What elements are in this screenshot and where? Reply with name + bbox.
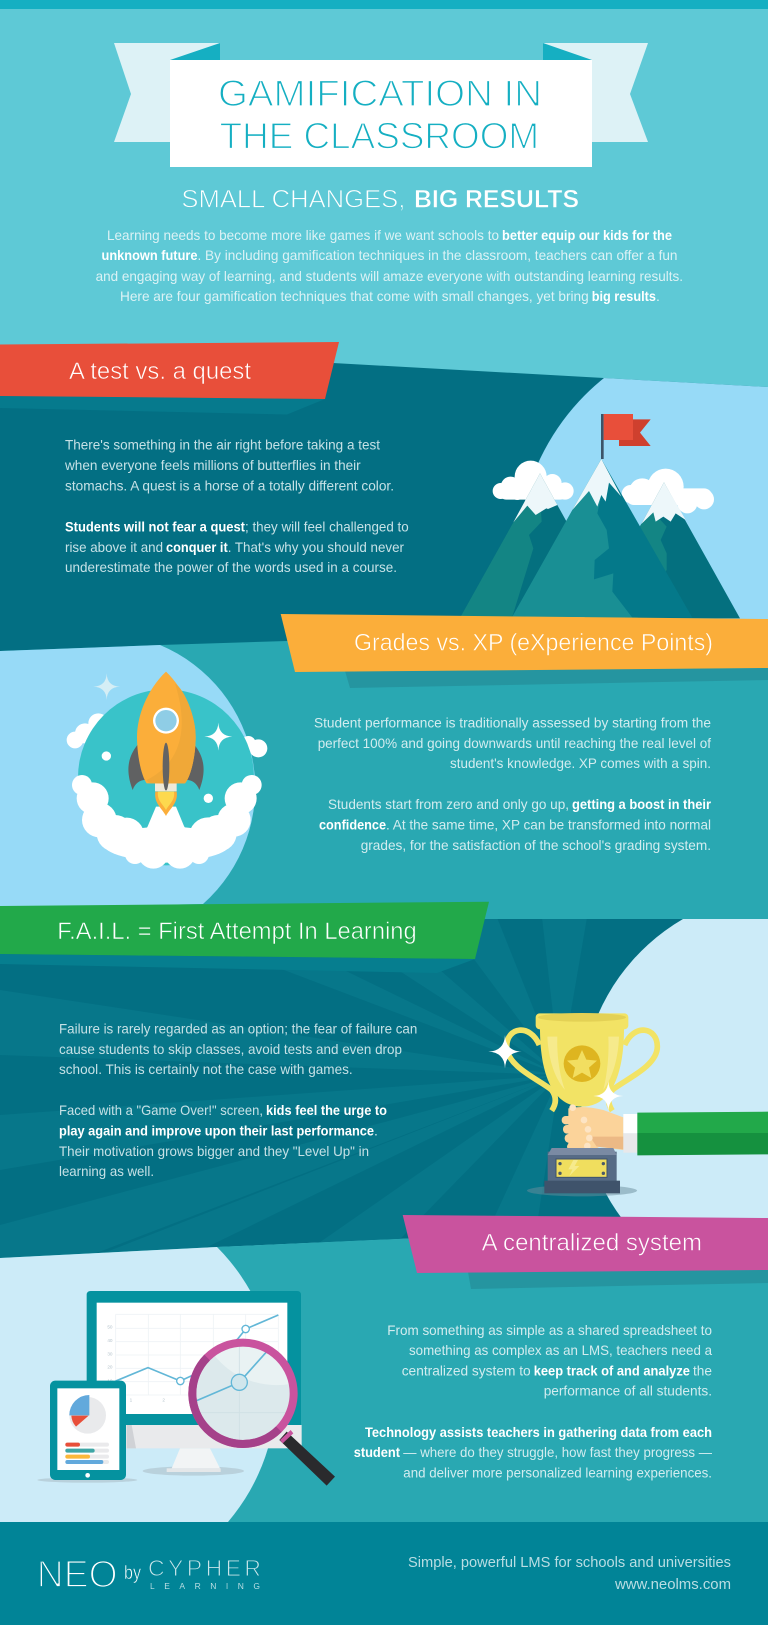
icon: monitor, tablet and magnifier <box>37 1291 335 1486</box>
rocket fins <box>128 745 145 790</box>
text block: section 4: From something as simple as a shared spreadsheet to <box>387 1322 712 1338</box>
intro paragraph: and engaging way of learning, and students will amaze everyone with outstanding learning results. <box>96 268 683 284</box>
panel: section 3 background with sunburst <box>0 919 768 1258</box>
rocket body <box>137 672 196 783</box>
text block: section 2: getting a boost in their <box>572 796 712 812</box>
monitor frame <box>87 1291 301 1425</box>
text block: section 1: when everyone feels millions of butterflies in their <box>64 457 361 473</box>
chart axis labels: 50 <box>107 1325 113 1330</box>
intro paragraph: better equip our kids for the <box>502 227 672 243</box>
title <box>218 73 542 156</box>
text block: section 2: student's knowledge. XP comes with a spin. <box>450 755 711 771</box>
trophy cup <box>540 1028 624 1107</box>
screen <box>97 1303 287 1414</box>
centre fin <box>163 743 169 791</box>
footer tagline: Simple, powerful LMS for schools and universities <box>408 1555 731 1571</box>
text block: section 3: Faced with a "Game Over!" screen, <box>59 1102 263 1118</box>
chart axis labels: 30 <box>107 1352 113 1357</box>
text block: section 2: Students start from zero and only go up, <box>328 796 569 812</box>
text block: section 2: Student performance is traditionally assessed by starting from the <box>314 715 711 731</box>
text block: section 3: play again and improve upon their last performance <box>59 1123 374 1139</box>
clouds behind peaks <box>493 461 714 513</box>
heading banner: A centralized system: A centralized system <box>482 1230 702 1257</box>
left mountain <box>461 473 597 617</box>
chart axis labels: 2 <box>162 1398 165 1403</box>
flag <box>601 414 651 459</box>
text block: section 3: kids feel the urge to <box>266 1102 387 1118</box>
magnifier handle <box>279 1432 335 1486</box>
heading banner: Grades vs. XP <box>281 614 768 672</box>
small bubbles <box>102 751 111 761</box>
text block: section 1 <box>64 436 409 575</box>
tablet shadow <box>37 1477 137 1483</box>
intro paragraph: big results <box>592 288 656 304</box>
subtitle: SMALL CHANGES, <box>181 185 405 213</box>
text block: section 2: perfect 100% and going downwards until reaching the real level of <box>318 735 711 751</box>
text block: section 2 <box>314 715 712 853</box>
base shadow <box>527 1185 637 1196</box>
logo: by <box>124 1563 141 1584</box>
chart axis labels <box>107 1325 165 1403</box>
text block: section 4: performance of all students. <box>544 1383 712 1399</box>
chart axis labels: 1 <box>130 1398 133 1403</box>
rocket exhaust trail <box>143 807 188 837</box>
heading banner: A centralized system <box>403 1215 768 1273</box>
text block: section 3: cause students to skip classes, avoid tests and even drop <box>59 1041 402 1057</box>
text block: section 4: student <box>354 1444 400 1460</box>
text block: section 3: school. This is certainly not the case with games. <box>59 1061 353 1077</box>
logo <box>37 1554 261 1596</box>
text block: section 3: Failure is rarely regarded as an option; the fear of failure can <box>59 1020 417 1036</box>
heading banner: F.A.I.L.: F.A.I.L. = First Attempt In Learning <box>57 918 417 945</box>
central mountain <box>512 459 692 618</box>
panel: footer <box>0 1522 768 1625</box>
smoke clouds <box>72 775 262 869</box>
trophy rim <box>536 1013 628 1029</box>
text block: section 4: and deliver more personalized learning experiences. <box>403 1465 712 1481</box>
text block: section 1: . That's why you should never <box>228 539 404 555</box>
panel: section 1 background <box>0 363 768 665</box>
intro paragraph <box>96 227 683 304</box>
heading banner: F.A.I.L. <box>0 902 489 959</box>
panel: section 2 background <box>0 636 768 925</box>
text block: section 1: underestimate the power of the words used in a course. <box>65 559 397 575</box>
intro paragraph: Learning needs to become more like games if we want schools to <box>107 227 499 243</box>
tablet <box>50 1381 126 1480</box>
text block: section 4: — where do they struggle, how fast they progress — <box>403 1444 712 1460</box>
chart line <box>116 1315 278 1385</box>
text block: section 4 <box>354 1322 712 1481</box>
panel: section 4 background <box>0 1230 768 1530</box>
chart axis labels: 20 <box>107 1365 113 1370</box>
text block: section 1: conquer it <box>166 539 228 555</box>
icon: rocket launch <box>67 672 267 869</box>
ribbon left fold <box>170 43 220 60</box>
ribbon right fold <box>543 43 592 60</box>
text block: section 4: Technology assists teachers in gathering data from each <box>365 1424 712 1440</box>
text block: section 4: the <box>693 1363 712 1379</box>
monitor shadow <box>143 1466 244 1476</box>
heading banner: Grades vs. XP: Grades vs. XP (eXperience Points) <box>354 630 713 657</box>
window <box>153 708 179 734</box>
ribbon right tail <box>543 43 648 142</box>
magnifier lens <box>193 1343 293 1443</box>
right mountain <box>584 482 740 618</box>
heading banner: A test vs. a quest: A test vs. a quest <box>69 358 251 385</box>
intro paragraph: Here are four gamification techniques that come with small changes, yet bring <box>120 288 589 304</box>
subtitle <box>181 185 579 213</box>
pie chart <box>69 1395 106 1434</box>
text block: section 1: ; they will feel challenged to <box>245 519 409 535</box>
intro paragraph: . <box>656 288 660 304</box>
heading banner: A test vs. a quest <box>0 342 339 399</box>
cuff <box>623 1114 637 1133</box>
chart grid <box>116 1314 278 1395</box>
nozzle <box>155 783 177 791</box>
trophy base <box>548 1152 617 1183</box>
ribbon left tail <box>114 43 220 142</box>
text block: section 2: grades, for the satisfaction of the school's grading system. <box>361 837 711 853</box>
flame <box>155 792 177 816</box>
text block: section 4: keep track of and analyze <box>534 1363 690 1379</box>
chart axis labels: 40 <box>107 1338 113 1343</box>
text block: section 3: . <box>374 1123 378 1139</box>
icon: mountains with flag and clouds <box>461 414 740 618</box>
sleeve <box>637 1112 768 1133</box>
chart axis labels: 10 <box>107 1378 113 1383</box>
monitor stand <box>172 1448 220 1468</box>
title: THE CLASSROOM <box>220 115 539 156</box>
footer url: www.neolms.com <box>614 1577 731 1593</box>
trophy handles <box>507 1030 657 1111</box>
logo: LEARNING <box>150 1581 260 1591</box>
hand <box>568 1107 623 1151</box>
text block: section 2: . At the same time, XP can be transformed into normal <box>386 817 711 833</box>
sparkles <box>488 1035 522 1068</box>
teal disc <box>78 689 254 865</box>
logo: CYPHER <box>148 1555 261 1581</box>
text block: section 4: centralized system to <box>402 1363 531 1379</box>
top bar <box>0 0 768 9</box>
progress bars <box>65 1443 109 1464</box>
title: GAMIFICATION IN <box>218 73 542 114</box>
back clouds <box>67 713 267 757</box>
intro paragraph: unknown future <box>102 247 198 263</box>
star medallion <box>564 1045 600 1082</box>
sparkles <box>93 673 120 700</box>
logo: NEO <box>37 1554 118 1596</box>
white title plate <box>170 60 592 167</box>
intro paragraph: . By including gamification techniques in the classroom, teachers can offer a fun <box>198 247 678 263</box>
text block: section 3: learning as well. <box>59 1163 154 1179</box>
icon: trophy held by hand <box>488 1013 768 1196</box>
text block: section 1: There's something in the air right before taking a test <box>65 436 380 452</box>
text block: section 1: Students will not fear a quest <box>65 519 245 535</box>
text block: section 2: confidence <box>319 817 386 833</box>
panel: header ribbon <box>114 43 648 167</box>
text block: section 1: rise above it and <box>65 539 163 555</box>
text block: section 1: stomachs. A quest is a horse of a totally different color. <box>65 478 394 494</box>
text block: section 3 <box>59 1020 417 1179</box>
text block: section 4: something as complex as an LMS, teachers need a <box>409 1342 712 1358</box>
subtitle: BIG RESULTS <box>414 185 579 213</box>
text block: section 3: Their motivation grows bigger and they "Level Up" in <box>59 1143 369 1159</box>
